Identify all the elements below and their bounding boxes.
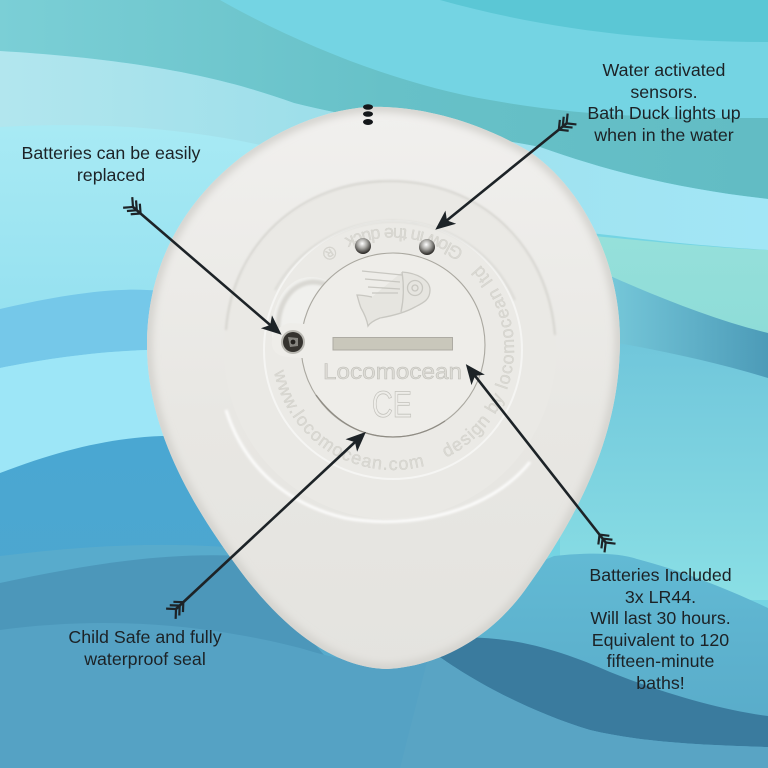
callout: water activated sensors: Bath Duck lights up (587, 103, 741, 123)
callout: batteries included (589, 565, 732, 693)
battery cover (272, 253, 485, 437)
callout: child safe seal (68, 627, 222, 669)
recessed plate (224, 181, 556, 522)
arrow: batteries replaced (122, 196, 287, 341)
charge slot (333, 338, 452, 350)
body edge shading (147, 107, 620, 669)
sensors (355, 238, 435, 255)
callout: water activated sensors: Water activated (603, 60, 725, 80)
arrow: batteries included (459, 359, 617, 553)
callout: batteries included: fifteen-minute (607, 651, 714, 671)
callout: batteries included: Equivalent to 120 (592, 630, 729, 650)
callout: water activated sensors (587, 60, 741, 145)
CE mark: CE (372, 384, 412, 425)
arrow: waterproof seal (165, 426, 372, 620)
callout: child safe seal: Child Safe and fully (68, 627, 222, 647)
duck base body (147, 104, 620, 669)
engraved ring text (274, 228, 514, 470)
engraved ring text: design by locomocean ltd (444, 266, 514, 456)
screw (281, 330, 305, 354)
engraved ring text: www.locomocean.com (274, 370, 424, 470)
callout: batteries replaced (22, 143, 200, 185)
callout: batteries replaced: Batteries can be easily (22, 143, 200, 163)
battery door hinge slot (272, 277, 332, 338)
callout: water activated sensors: sensors. (630, 82, 698, 102)
vent holes (363, 104, 373, 125)
callout: batteries included: Will last 30 hours. (590, 608, 731, 628)
callout: batteries replaced: replaced (77, 165, 145, 185)
callout: child safe seal: waterproof seal (84, 649, 206, 669)
engraved disc (264, 221, 522, 479)
callout: batteries included: Batteries Included (589, 565, 732, 585)
engraved ring text: Glow in the duck (344, 228, 462, 259)
fish logo (357, 271, 430, 326)
arrow: water sensors (430, 112, 577, 236)
callout: batteries included: 3x LR44. (625, 587, 696, 607)
callout: water activated sensors: when in the water (594, 125, 734, 145)
screw tab (272, 323, 308, 358)
Locomocean logo: Locomocean (323, 359, 462, 384)
callout: batteries included: baths! (636, 673, 685, 693)
engraved ring text: ® (323, 246, 336, 260)
